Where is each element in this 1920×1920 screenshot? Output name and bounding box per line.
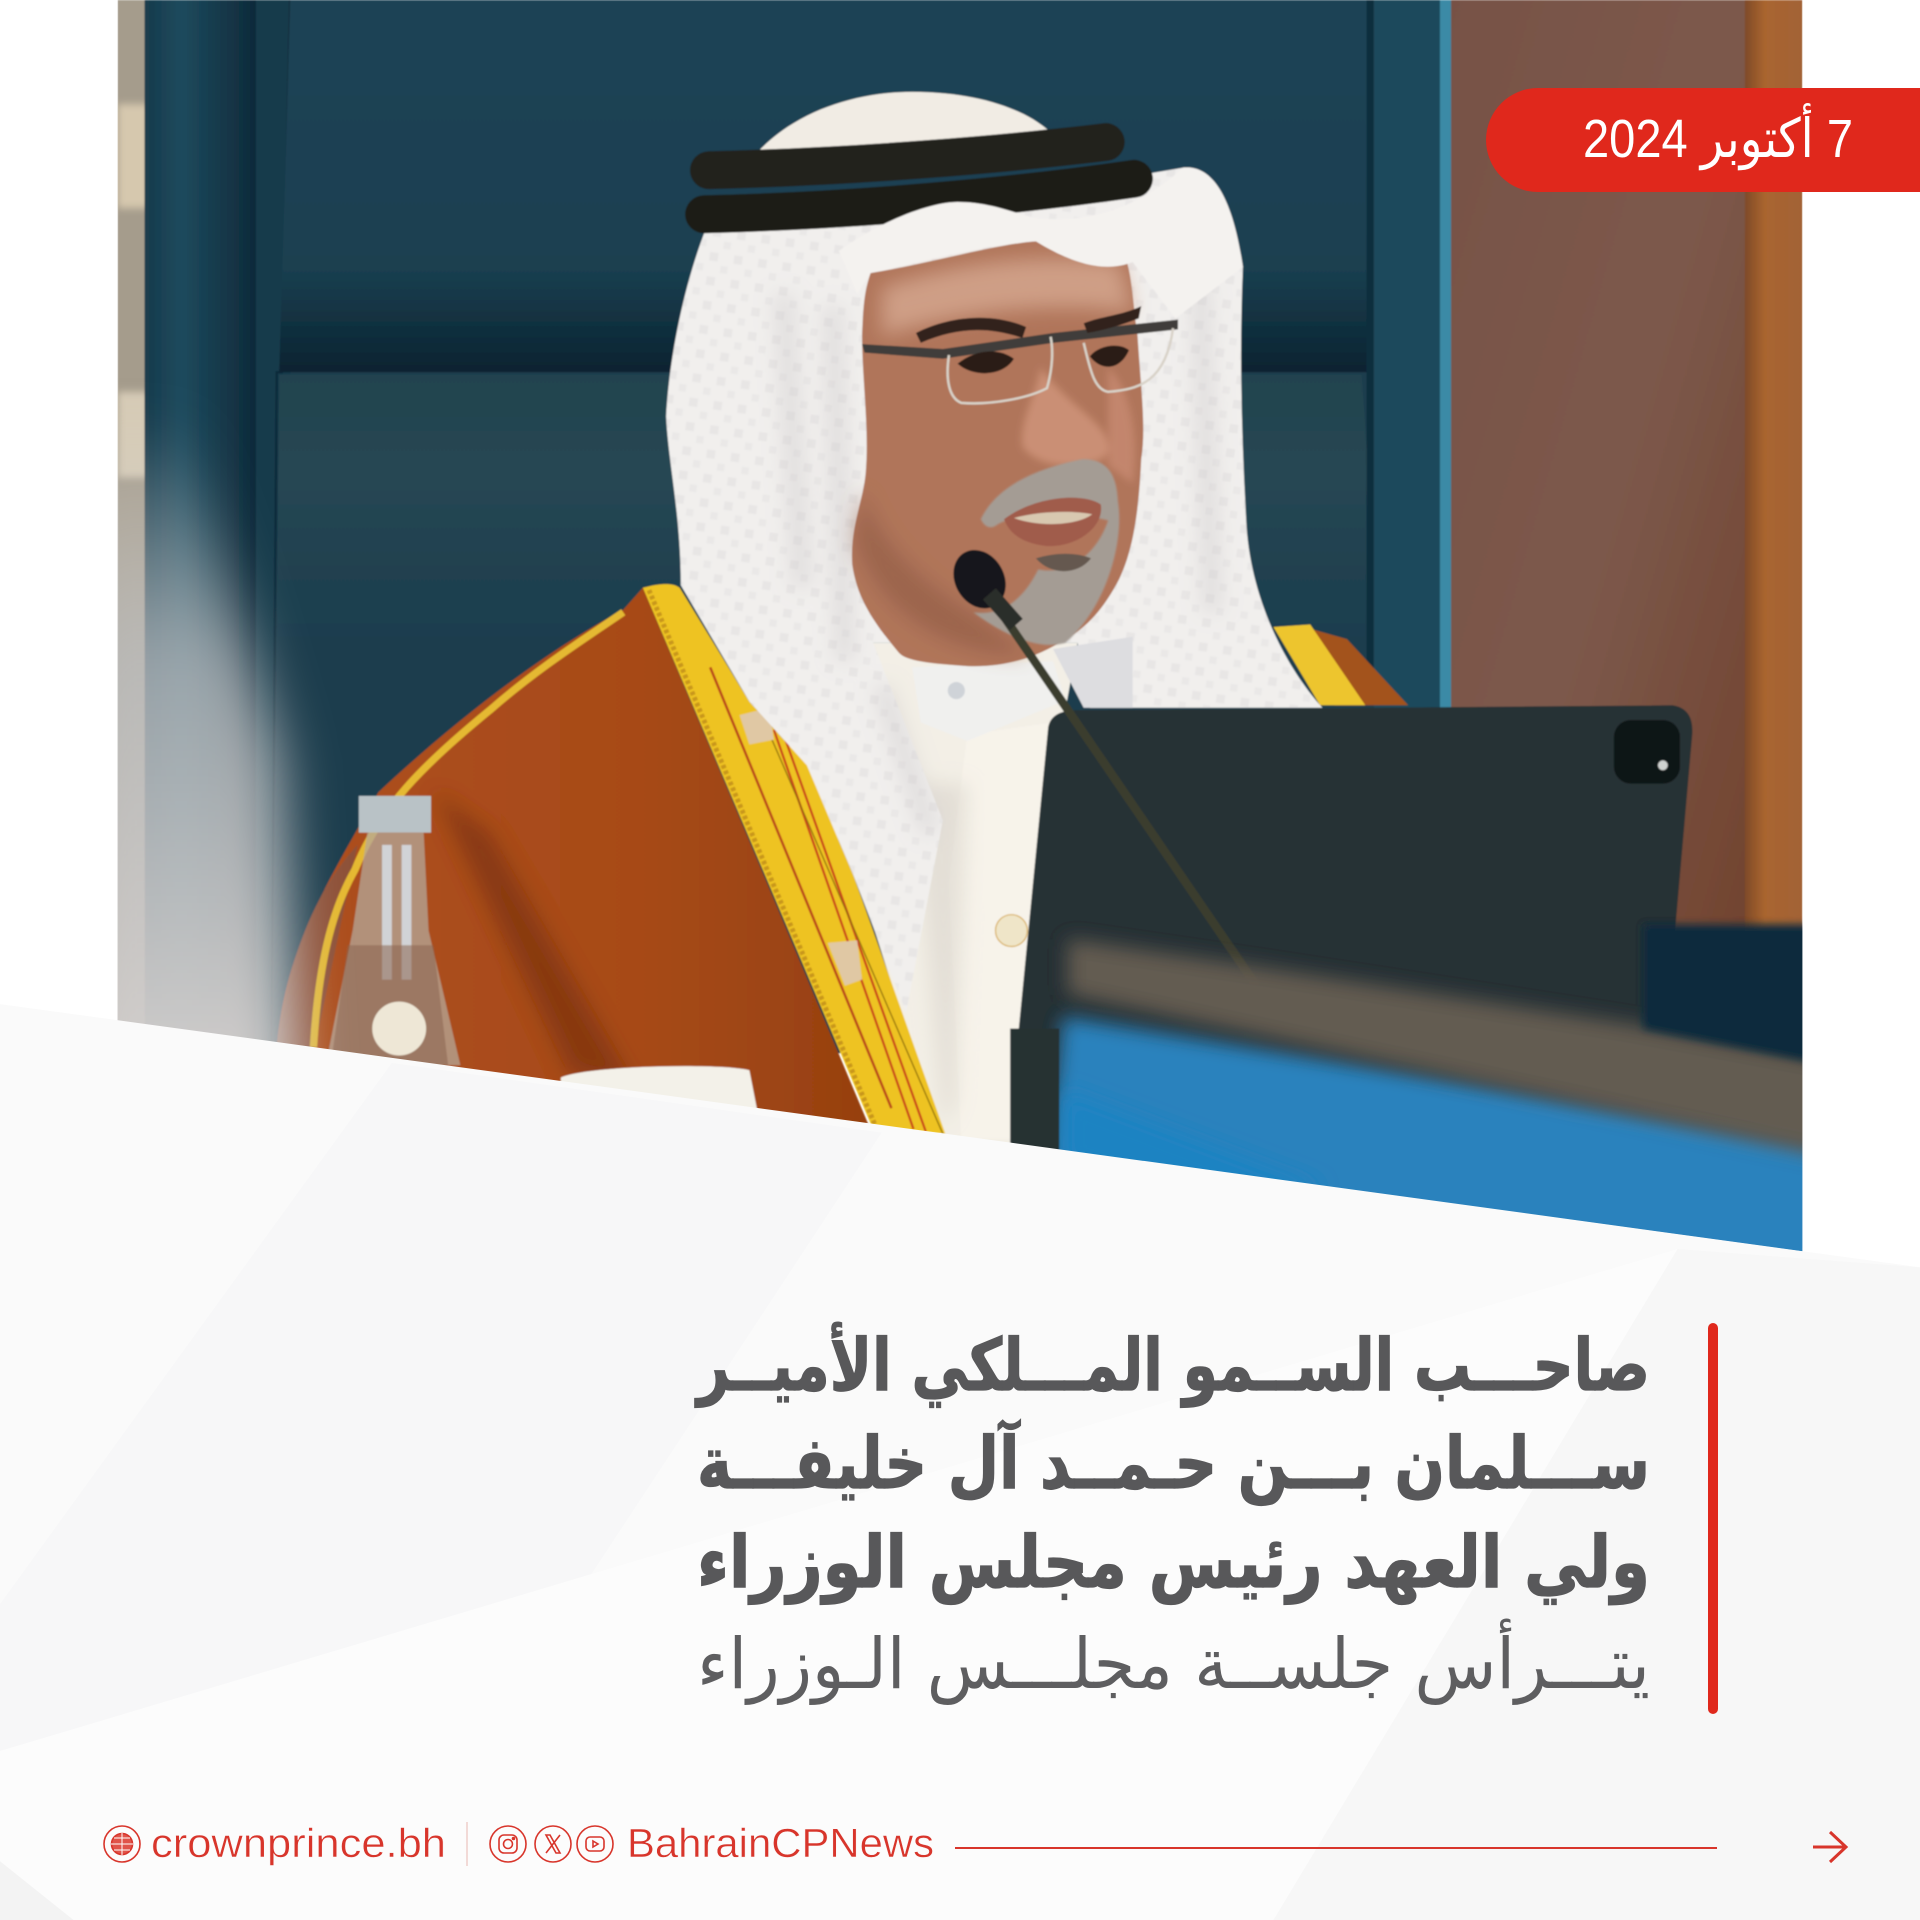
headscarf	[666, 168, 1322, 1013]
white thobe	[784, 643, 1078, 1145]
red vertical accent bar	[1708, 1323, 1718, 1714]
headline line 2: ســـلمان بـــن حـمــد آل خليفـــة	[697, 1419, 1650, 1506]
icon: youtube	[577, 1826, 613, 1862]
icon: globe	[104, 1826, 140, 1862]
wood wall	[1450, 0, 1802, 931]
social handle: BahrainCPNews	[627, 1820, 934, 1866]
scarf fold over the forehead	[839, 168, 1243, 318]
gold trim of the robe	[643, 584, 945, 1134]
headline line 1: صاحـــب الســمو المـــلكي الأميــر	[695, 1321, 1650, 1408]
face	[852, 241, 1143, 666]
microphone	[943, 540, 1256, 986]
headline line 3: ولي العهد رئيس مجلس الوزراء	[697, 1520, 1650, 1605]
beard and mouth	[973, 459, 1119, 645]
glasses and eyes	[862, 306, 1178, 403]
lower panel with subtle geometric background	[0, 1004, 1920, 1920]
arrow	[1813, 1832, 1846, 1862]
robe	[276, 588, 1408, 1133]
photo: crown prince chairing the cabinet session	[118, 0, 1802, 1252]
collar	[947, 638, 1133, 710]
footer	[104, 1820, 1846, 1866]
footer line	[955, 1847, 1717, 1849]
website: crownprince.bh	[151, 1820, 446, 1866]
date badge	[1486, 88, 1920, 192]
icon: instagram	[490, 1826, 526, 1862]
blurred foreground desk	[1010, 924, 1886, 1347]
water bottle	[326, 796, 460, 1065]
cap and black agal	[704, 92, 1134, 214]
headline line 4: يتـــرأس جلســة مجلـــس الـوزراء	[697, 1618, 1650, 1705]
date text: 7 أكتوبر 2024	[1583, 103, 1853, 170]
footer divider	[466, 1822, 468, 1866]
tablet	[1010, 705, 1861, 1298]
headline text	[695, 1321, 1650, 1705]
cup	[561, 1066, 759, 1120]
left background strip	[118, 0, 146, 1020]
blurred left foreground	[73, 416, 300, 1102]
icon: x	[535, 1826, 571, 1862]
chair	[144, 0, 1455, 1053]
